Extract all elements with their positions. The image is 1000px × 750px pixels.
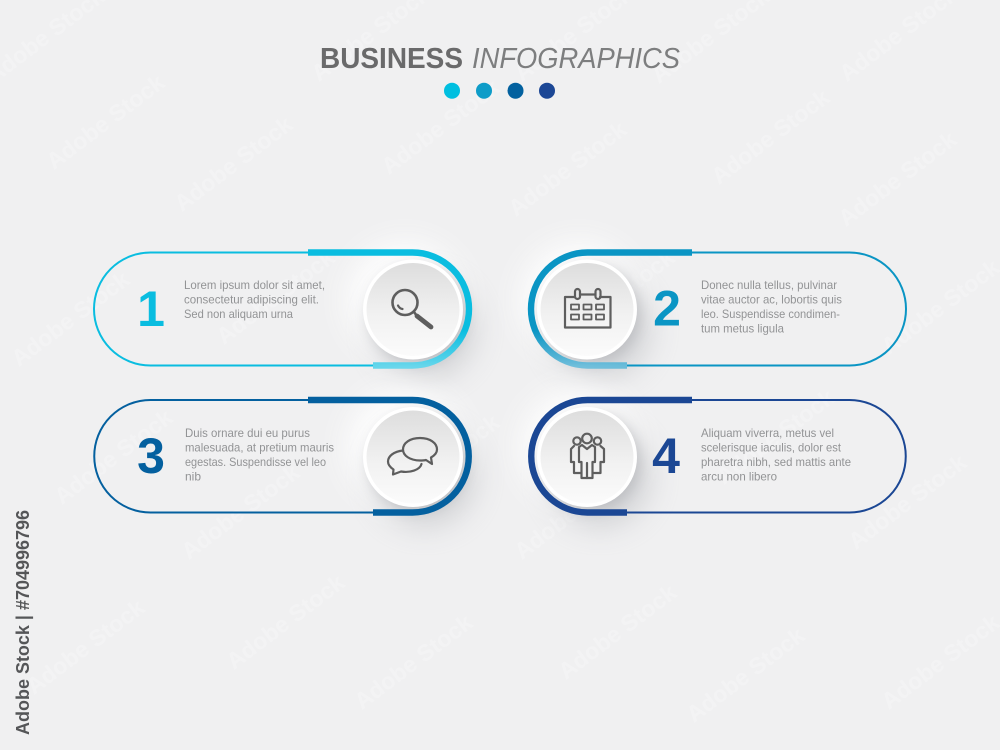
title: BUSINESS bbox=[320, 43, 463, 75]
colour dots bbox=[444, 83, 555, 99]
text block 4: scelerisque iaculis, dolor est bbox=[701, 440, 842, 454]
circle button bbox=[537, 407, 637, 507]
soft glow and shadow bbox=[347, 389, 475, 526]
pill outline bbox=[94, 252, 412, 366]
icon: people bbox=[571, 434, 604, 478]
text block 2: Donec nulla tellus, pulvinar bbox=[701, 278, 837, 292]
thick arc bbox=[531, 252, 692, 366]
soft glow and shadow bbox=[521, 389, 650, 526]
pill outline bbox=[94, 400, 413, 512]
soft glow and shadow bbox=[347, 242, 475, 378]
text block 4: pharetra nibh, sed mattis ante bbox=[701, 455, 851, 469]
watermark pattern: Adobe Stock bbox=[833, 126, 961, 231]
text block 4: arcu non libero bbox=[701, 470, 777, 484]
watermark pattern: Adobe Stock bbox=[843, 449, 971, 554]
number 3: 3 bbox=[137, 428, 165, 484]
text block 3: egestas. Suspendisse vel leo bbox=[185, 455, 326, 469]
watermark pattern: Adobe Stock bbox=[551, 244, 679, 349]
watermark pattern: Adobe Stock bbox=[706, 84, 834, 189]
watermark pattern: Adobe Stock bbox=[553, 579, 681, 684]
number 4: 4 bbox=[652, 428, 680, 484]
number 1: 1 bbox=[137, 281, 165, 337]
thick arc bbox=[308, 400, 469, 512]
watermark pattern: Adobe Stock bbox=[681, 622, 809, 727]
watermark pattern: Adobe Stock bbox=[6, 266, 134, 371]
text block 3 bbox=[185, 426, 334, 484]
text block 3: malesuada, at pretium mauris bbox=[185, 440, 334, 454]
text block 2 bbox=[701, 278, 842, 336]
title bbox=[320, 43, 681, 75]
watermark pattern: Adobe Stock bbox=[169, 111, 297, 216]
watermark pattern: Adobe Stock bbox=[211, 244, 339, 349]
watermark pattern: Adobe Stock bbox=[221, 569, 349, 674]
panel: step 1 bbox=[94, 242, 475, 378]
watermark pattern: Adobe Stock bbox=[509, 459, 637, 564]
icon: calendar bbox=[565, 289, 610, 328]
soft glow and shadow bbox=[521, 242, 650, 378]
text block 1: Sed non aliquam urna bbox=[184, 307, 293, 321]
watermark pattern: Adobe Stock bbox=[503, 116, 631, 221]
icon: magnifier bbox=[392, 290, 431, 327]
text block 2: leo. Suspendisse condimen- bbox=[701, 307, 840, 321]
circle button bbox=[363, 407, 463, 507]
watermark pattern: Adobe Stock bbox=[21, 594, 149, 699]
icon: speech bubbles bbox=[388, 438, 437, 474]
watermark pattern: Adobe Stock bbox=[376, 74, 504, 179]
watermark pattern: Adobe Stock bbox=[41, 69, 169, 174]
text block 1 bbox=[184, 278, 325, 321]
text block 4: Aliquam viverra, metus vel bbox=[701, 426, 834, 440]
number 2: 2 bbox=[653, 280, 681, 336]
circle button bbox=[537, 260, 637, 360]
watermark pattern: Adobe Stock bbox=[376, 409, 504, 514]
pill outline bbox=[588, 252, 906, 366]
text block 2: vitae auctor ac, lobortis quis bbox=[701, 292, 842, 306]
text block 3: Duis ornare dui eu purus bbox=[185, 426, 310, 440]
watermark pattern: Adobe Stock bbox=[49, 404, 177, 509]
thick arc bbox=[308, 252, 469, 366]
text block 1: Lorem ipsum dolor sit amet, bbox=[184, 278, 325, 292]
panel: step 4 bbox=[521, 389, 906, 526]
pill outline bbox=[588, 400, 906, 512]
stock id caption: Adobe Stock | #704996796 bbox=[13, 510, 33, 735]
panel: step 3 bbox=[94, 389, 475, 526]
watermark pattern: Adobe Stock bbox=[711, 384, 839, 489]
watermark pattern: Adobe Stock bbox=[176, 459, 304, 564]
text block 4 bbox=[701, 426, 851, 484]
circle button bbox=[363, 260, 463, 360]
text block 3: nib bbox=[185, 470, 201, 484]
text block 1: consectetur adipiscing elit. bbox=[184, 292, 319, 306]
watermark pattern: Adobe Stock bbox=[349, 609, 477, 714]
panel: step 2 bbox=[521, 242, 906, 378]
text block 2: tum metus ligula bbox=[701, 322, 784, 336]
title: INFOGRAPHICS bbox=[472, 43, 681, 75]
thick arc bbox=[531, 400, 692, 512]
